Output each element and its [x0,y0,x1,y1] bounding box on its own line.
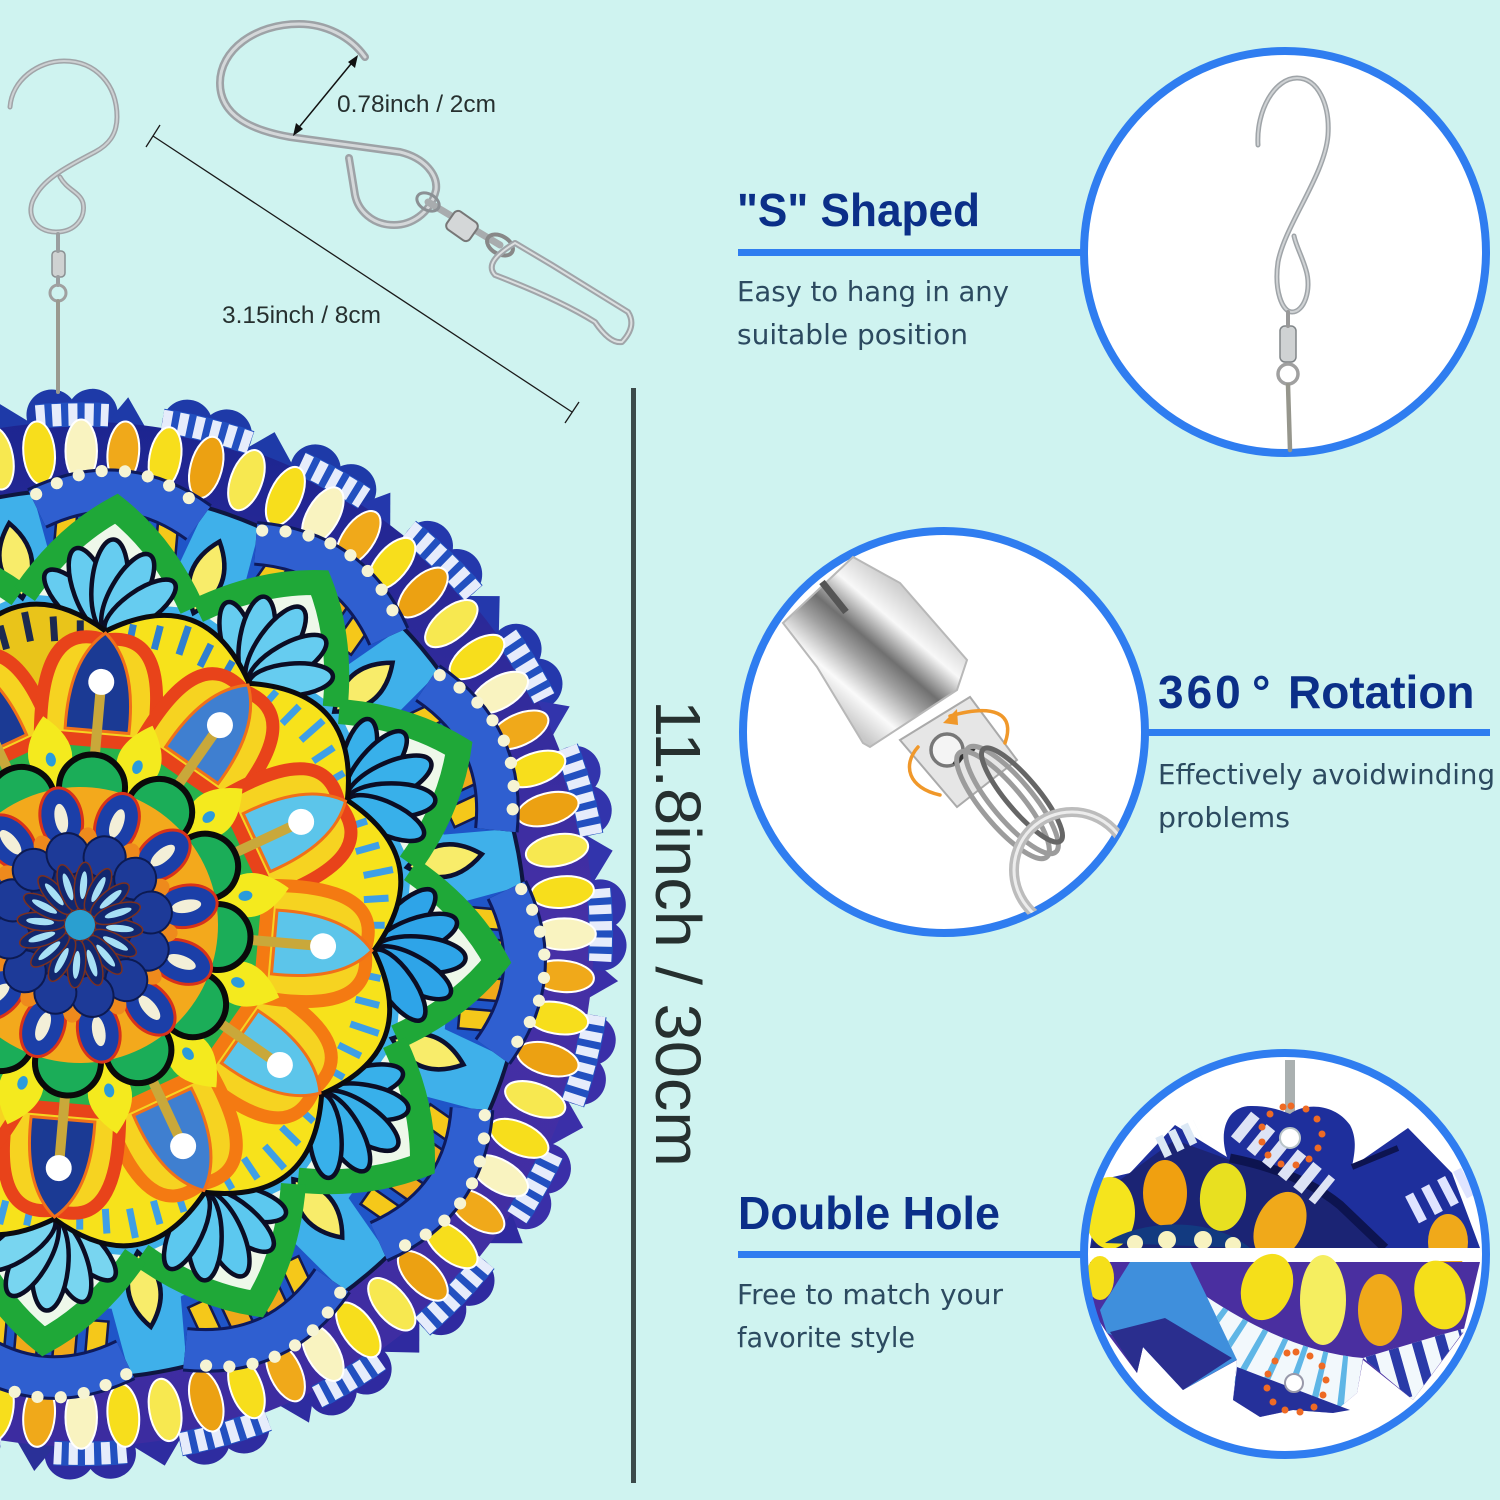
label: hook length: 3.15inch / 8cm [222,302,381,329]
dimension bar: diameter [631,388,636,1483]
right S hook with swivel clip [220,24,631,342]
connector line: double hole [738,1251,1084,1258]
text: S shaped description [737,275,1009,351]
heading: double hole: Double Hole [738,1187,1000,1239]
circle: S hook close-up [1084,51,1486,453]
mandala wind spinner [0,280,736,1500]
text: double hole description [737,1278,1003,1354]
circle: double hole close-up [1080,1053,1490,1455]
text: double hole description: favorite style [737,1321,915,1354]
text: rotation description: problems [1158,801,1290,834]
connector line: rotation [1145,729,1490,736]
heading: S shaped: "S" Shaped [737,184,980,236]
dimension line: 3.15 inch [146,125,579,423]
divider strip [1104,1248,1468,1261]
text: S shaped description: Easy to hang in any [737,275,1009,308]
heading: rotation: ° [1252,666,1270,718]
top half of spinner [1085,1060,1480,1270]
icon: orange rotation arrow [909,709,1008,795]
heading: rotation: 360 [1158,666,1244,718]
circle: swivel close-up [743,531,1145,933]
left S hook with swivel and wire [10,61,117,392]
text: S shaped description: suitable position [737,318,968,351]
label: hook opening: 0.78inch / 2cm [337,91,496,118]
bottom half of spinner [1086,1246,1480,1417]
label: diameter: 11.8inch / 30cm [642,700,714,1167]
text: double hole description: Free to match your [737,1278,1003,1311]
orange dots: bottom hole [1264,1348,1330,1416]
heading: rotation: Rotation [1288,666,1475,718]
text: rotation description [1158,758,1495,834]
connector line: S shaped [738,249,1084,256]
text: rotation description: Effectively avoidwinding [1158,758,1495,791]
dimension arrow: 0.78 inch [293,55,358,136]
orange dots: top hole [1258,1102,1326,1168]
circle outline [1084,1053,1486,1455]
